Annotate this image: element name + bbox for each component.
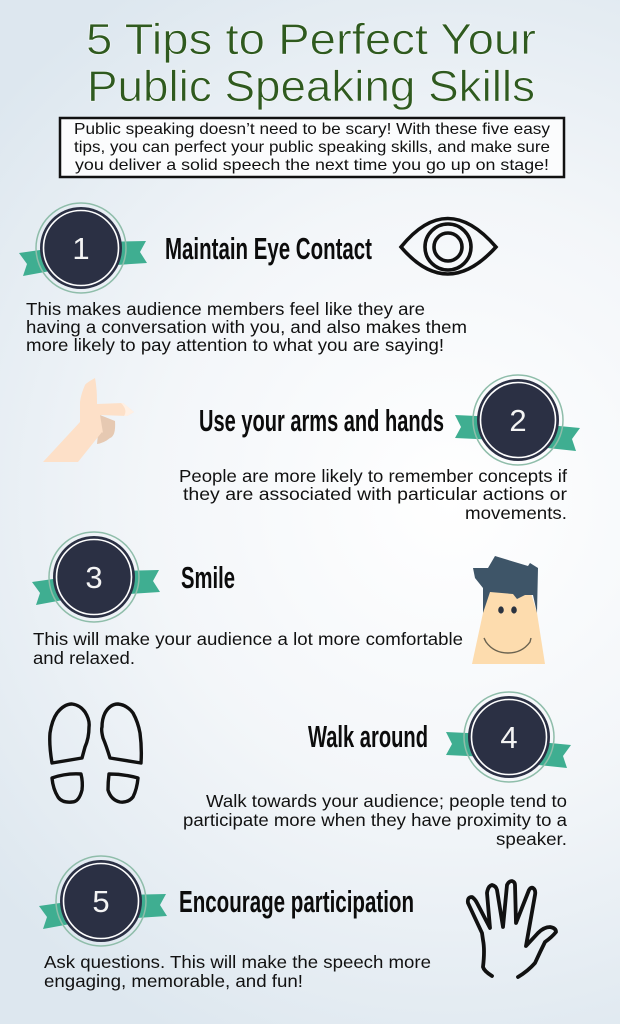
text 3 <box>33 629 463 668</box>
text 4: participate more when they have proximity to a <box>183 810 567 830</box>
intro box: tips, you can perfect your public speaking skills, and make sure <box>74 139 550 156</box>
icon: eye <box>401 218 496 274</box>
title <box>86 15 536 111</box>
text 4: Walk towards your audience; people tend to <box>206 791 567 811</box>
badge 1 <box>19 203 147 293</box>
badge 3: 3 <box>85 560 103 595</box>
badge 5: 5 <box>92 884 110 919</box>
text 1: having a conversation with you, and also makes them <box>26 317 467 337</box>
icon: footprints <box>50 704 141 802</box>
text 5: Ask questions. This will make the speech more <box>44 952 431 972</box>
text 2: movements. <box>465 503 567 523</box>
text 5: engaging, memorable, and fun! <box>44 971 303 991</box>
badge 4 <box>446 692 571 782</box>
intro box <box>60 118 564 177</box>
badge 1: 1 <box>72 231 90 266</box>
icon: pointing hand <box>43 378 134 462</box>
badge 2 <box>455 375 580 465</box>
heading 5: Encourage participation <box>179 884 414 919</box>
text 2: they are associated with particular actions or <box>183 484 567 504</box>
title: 5 Tips to Perfect Your <box>86 15 536 64</box>
badge 4: 4 <box>500 720 518 755</box>
text 1 <box>26 299 467 355</box>
text 5 <box>44 952 431 991</box>
text 1: This makes audience members feel like they are <box>26 299 425 319</box>
title: Public Speaking Skills <box>87 62 535 111</box>
text 2: People are more likely to remember concepts if <box>179 466 567 486</box>
intro box: Public speaking doesn’t need to be scary! With these five easy <box>74 121 550 138</box>
text 4 <box>183 791 567 849</box>
text 4: speaker. <box>496 829 567 849</box>
intro box: you deliver a solid speech the next time you go up on stage! <box>75 157 549 174</box>
heading 4: Walk around <box>308 719 428 754</box>
heading 1: Maintain Eye Contact <box>165 231 372 266</box>
icon: open hand <box>468 881 556 977</box>
badge 2: 2 <box>509 403 527 438</box>
text 3: and relaxed. <box>33 648 135 668</box>
text 2 <box>179 466 567 523</box>
badge 5 <box>39 856 167 946</box>
icon: smiling face <box>472 556 545 664</box>
text 3: This will make your audience a lot more comfortable <box>33 629 463 649</box>
heading 3: Smile <box>181 560 235 595</box>
badge 3 <box>32 532 160 622</box>
text 1: more likely to pay attention to what you are saying! <box>26 335 444 355</box>
heading 2: Use your arms and hands <box>199 403 444 438</box>
